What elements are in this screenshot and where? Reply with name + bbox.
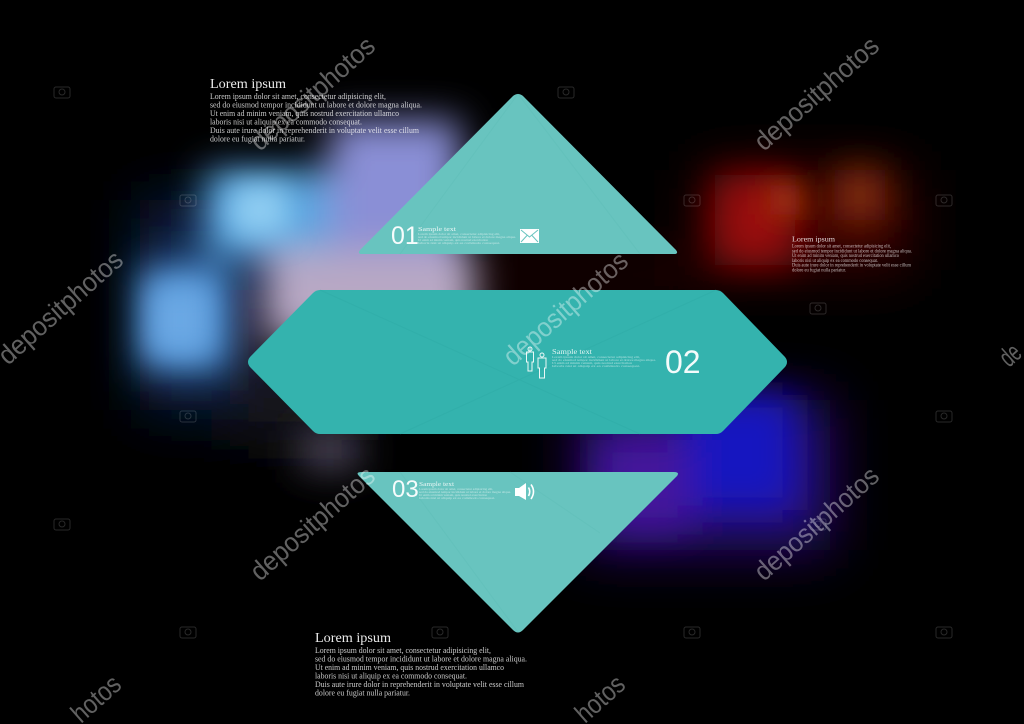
sample text 03: Ut enim ad minim veniam, quis nostrud exercitation <box>419 493 487 498</box>
sample text 02: sed do eiusmod tempor incididunt ut labore et dolore magna aliqua. <box>552 358 656 362</box>
text block: bottom: sed do eiusmod tempor incididunt ut labore et dolore magna aliqua. <box>315 654 527 664</box>
text block: top left: Ut enim ad minim veniam, quis nostrud exercitation ullamco <box>210 108 399 118</box>
text block: bottom <box>315 630 527 698</box>
text block: bottom: Duis aute irure dolor in reprehenderit in voluptate velit esse cillum <box>315 679 524 689</box>
icon: speaker <box>515 483 534 500</box>
sample text 02: Lorem ipsum dolor sit amet, consectetur adipisicing elit, <box>552 355 640 360</box>
text block: top left: laboris nisi ut aliquip ex ea commodo consequat. <box>210 116 362 126</box>
sample text 03: laboris nisi ut aliquip ex ea commodo consequat. <box>419 496 495 500</box>
text block: right: sed do eiusmod tempor incididunt ut labore et dolore magna aliqua. <box>792 249 912 254</box>
small camera watermarks <box>54 87 952 638</box>
number 01: 01 <box>391 222 419 250</box>
depositphotos watermarks: depositphotos <box>244 31 381 156</box>
number 02: 02 <box>665 344 701 380</box>
sample text 03: Sample text <box>419 481 454 488</box>
sample text 03: Lorem ipsum dolor sit amet, consectetur adipisicing elit, <box>419 487 493 492</box>
sample text 01: sed do eiusmod tempor incididunt ut labore et dolore magna aliqua. <box>418 235 516 239</box>
text block: top left: dolore eu fugiat nulla pariatur. <box>210 134 305 144</box>
text block: top left: Duis aute irure dolor in reprehenderit in voluptate velit esse cillum <box>210 125 419 135</box>
text block: top left: Lorem ipsum dolor sit amet, consectetur adipisicing elit, <box>210 91 386 101</box>
icon: two people <box>526 347 546 378</box>
text block: right <box>792 234 912 274</box>
sample text 02: Ut enim ad minim veniam, quis nostrud exercitation <box>552 361 632 366</box>
panel 01: top triangle <box>359 94 677 254</box>
sample text 02 <box>552 347 656 368</box>
sample text 02: laboris nisi ut aliquip ex ea commodo consequat. <box>552 364 640 368</box>
sample text 03 <box>419 481 511 500</box>
icon: envelope <box>520 229 539 243</box>
text block: right: laboris nisi ut aliquip ex ea commodo consequat. <box>792 259 878 264</box>
sample text 01: Ut enim ad minim veniam, quis nostrud exercitation <box>418 238 488 243</box>
sample text 02: Sample text <box>552 347 593 356</box>
text block: bottom: Lorem ipsum <box>315 630 392 645</box>
sample text 01: Sample text <box>418 226 456 233</box>
sample text 03: sed do eiusmod tempor incididunt ut labore et dolore magna aliqua. <box>419 490 511 494</box>
text block: right: dolore eu fugiat nulla pariatur. <box>792 268 846 274</box>
depositphotos watermarks: depositphotos <box>497 246 634 371</box>
text block: right: Lorem ipsum dolor sit amet, consectetur adipisicing elit, <box>792 244 891 250</box>
depositphotos watermarks: depositphotos <box>748 31 885 156</box>
text block: bottom: Lorem ipsum dolor sit amet, consectetur adipisicing elit, <box>315 645 491 655</box>
sample text 01: Lorem ipsum dolor sit amet, consectetur adipisicing elit, <box>418 232 500 237</box>
text block: right: Ut enim ad minim veniam, quis nostrud exercitation ullamco <box>792 254 899 259</box>
depositphotos watermarks: depositphotos <box>244 461 381 586</box>
sample text 01 <box>418 226 516 245</box>
text block: top left: sed do eiusmod tempor incididunt ut labore et dolore magna aliqua. <box>210 100 422 110</box>
text block: bottom: laboris nisi ut aliquip ex ea commodo consequat. <box>315 670 467 680</box>
text block: bottom: dolore eu fugiat nulla pariatur. <box>315 688 410 698</box>
panel 03: bottom triangle <box>358 472 678 632</box>
text block: top left <box>210 76 422 144</box>
text block: bottom: Ut enim ad minim veniam, quis nostrud exercitation ullamco <box>315 662 504 672</box>
text block: top left: Lorem ipsum <box>210 76 287 91</box>
text block: right: Duis aute irure dolor in reprehenderit in voluptate velit esse cillum <box>792 264 911 269</box>
text block: right: Lorem ipsum <box>792 234 835 244</box>
panel 02: middle hexagon <box>248 290 787 434</box>
sample text 01: laboris nisi ut aliquip ex ea commodo consequat. <box>418 241 500 245</box>
depositphotos watermarks: depositphotos <box>748 461 885 586</box>
number 03: 03 <box>392 476 419 503</box>
